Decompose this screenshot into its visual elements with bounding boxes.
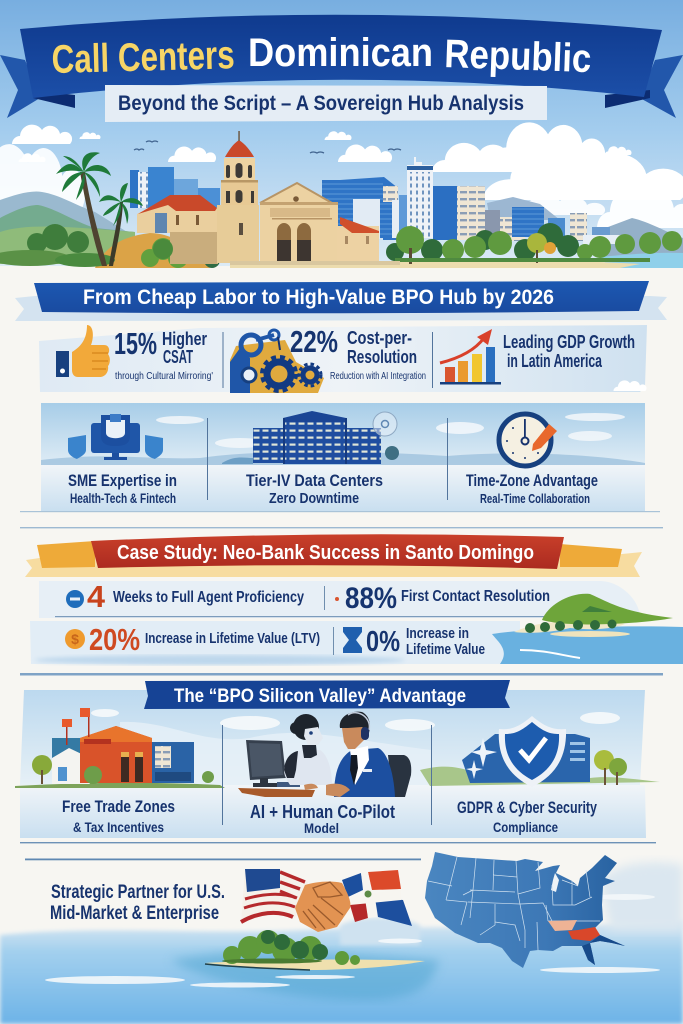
- icon: data center buildings: [222, 411, 399, 464]
- sky: [0, 0, 683, 266]
- section heading: [144, 680, 510, 709]
- chart: rising bars: [440, 329, 501, 384]
- palm trees: [56, 152, 143, 266]
- Dominican flag: [342, 870, 412, 926]
- stat: zero percent: Increase in: [406, 625, 469, 642]
- illustration: flags and handshake: [241, 869, 412, 932]
- metric: CSAT: CSAT: [163, 347, 193, 367]
- stat: weeks: [66, 579, 304, 614]
- ground and trees: [0, 223, 683, 268]
- stat: zero percent: Lifetime Value: [406, 641, 485, 658]
- data center column: [222, 411, 399, 507]
- metric: CSAT: [56, 325, 213, 382]
- title text: Call Centers: [51, 33, 235, 82]
- plaza shrubs: [153, 239, 173, 259]
- water and island: [492, 594, 683, 664]
- stat: lifetime value: Increase in Lifetime Value (LTV): [145, 630, 320, 647]
- stat: first contact resolution: [335, 582, 550, 615]
- handshake: [295, 882, 350, 932]
- icon: dollar coin: [65, 629, 85, 649]
- GDPR column: [457, 716, 627, 835]
- metric: cost per resolution: Reduction with AI Integration: [330, 371, 426, 382]
- icon: clock: [499, 414, 557, 466]
- partner text: Strategic Partner for U.S.: [51, 882, 225, 903]
- right skyline buildings: [322, 157, 625, 244]
- stat: zero percent: [343, 625, 485, 658]
- stat: weeks: 4: [87, 579, 106, 614]
- left skyline buildings: [130, 167, 220, 209]
- panel: expertise and infrastructure: [41, 403, 645, 511]
- birds: [134, 141, 401, 153]
- metric: cost per resolution: Resolution: [347, 347, 417, 367]
- map: United States: [425, 852, 625, 968]
- free trade zones column: & Tax Incentives: [73, 819, 164, 835]
- section 1 heading: From Cheap Labor to High-Value BPO Hub by 2026: [83, 286, 554, 309]
- subtitle plate: [105, 85, 547, 122]
- subtitle text: Beyond the Script – A Sovereign Hub Analysis: [118, 92, 524, 115]
- US flag: [241, 869, 308, 923]
- metric: CSAT: through Cultural Mirroring': [115, 371, 213, 382]
- icon: thumbs up: [56, 325, 110, 377]
- stat: first contact resolution: First Contact Resolution: [401, 588, 550, 605]
- illustration: security shield: [462, 716, 627, 787]
- metric: CSAT: Higher: [162, 329, 207, 349]
- GDPR column: Compliance: [493, 819, 558, 835]
- icon: monitor and shields: [68, 414, 163, 460]
- ribbon tails: [0, 55, 40, 118]
- colonial cathedral: [137, 131, 400, 265]
- clouds: [0, 122, 683, 228]
- metric: GDP growth: Leading GDP Growth: [503, 332, 635, 352]
- AI plus human column: Model: [304, 820, 339, 836]
- stat: lifetime value: [65, 622, 320, 657]
- metric: cost per resolution: [230, 324, 426, 393]
- panel: BPO Silicon Valley: [15, 680, 660, 838]
- illustration: island: [205, 930, 425, 970]
- stat: zero percent: 0%: [366, 626, 400, 658]
- panel: key metrics: [39, 324, 647, 393]
- metric: GDP growth: [440, 329, 635, 384]
- stat: first contact resolution: 88%: [345, 582, 397, 615]
- GDPR column: GDPR & Cyber Security: [457, 798, 597, 817]
- metric: GDP growth: in Latin America: [507, 351, 603, 371]
- SME expertise column: Health-Tech & Fintech: [70, 490, 176, 506]
- cloud accent: [614, 380, 647, 391]
- case study heading: Case Study: Neo-Bank Success in Santo Domingo: [117, 542, 534, 564]
- stat: weeks: Weeks to Full Agent Proficiency: [113, 589, 304, 606]
- data center column: Zero Downtime: [269, 490, 359, 507]
- icon: gears and robot arm: [230, 330, 324, 393]
- illustration: robot and human agent: [238, 712, 411, 797]
- icon: hourglass: [343, 627, 362, 653]
- time zone column: Real-Time Collaboration: [480, 491, 590, 506]
- panel: case study results: [30, 579, 683, 665]
- illustration: trade zone buildings: [32, 708, 214, 784]
- data center column: Tier-IV Data Centers: [246, 471, 383, 490]
- section heading: The “BPO Silicon Valley” Advantage: [174, 686, 466, 707]
- AI plus human column: [238, 712, 411, 836]
- title banner: [0, 15, 683, 122]
- footer divider: [25, 858, 421, 860]
- section 1 heading: [15, 281, 667, 321]
- title banner: Republic: [444, 32, 592, 81]
- icon: dollar coin: $: [71, 631, 79, 647]
- partner text: [50, 882, 225, 924]
- header landscape scene: [0, 0, 683, 268]
- free trade zones column: Free Trade Zones: [62, 797, 175, 816]
- free trade zones column: [32, 708, 214, 835]
- title banner: Dominican: [248, 31, 433, 75]
- mountains: [0, 192, 140, 264]
- SME expertise column: [68, 414, 177, 506]
- AI plus human column: AI + Human Co-Pilot: [250, 802, 395, 822]
- time zone column: Time-Zone Advantage: [466, 471, 598, 490]
- footer ocean scene: [0, 862, 683, 1024]
- stat: lifetime value: 20%: [89, 622, 140, 657]
- partner text: Mid-Market & Enterprise: [50, 903, 219, 924]
- icon: minus badge: [66, 590, 84, 608]
- SME expertise column: SME Expertise in: [68, 471, 177, 490]
- case study heading: [25, 534, 642, 577]
- metric: cost per resolution: 22%: [290, 324, 338, 359]
- metric: CSAT: 15%: [114, 326, 157, 361]
- metric: cost per resolution: Cost-per-: [347, 328, 412, 348]
- time zone column: [466, 414, 598, 506]
- main ribbon: [20, 15, 662, 98]
